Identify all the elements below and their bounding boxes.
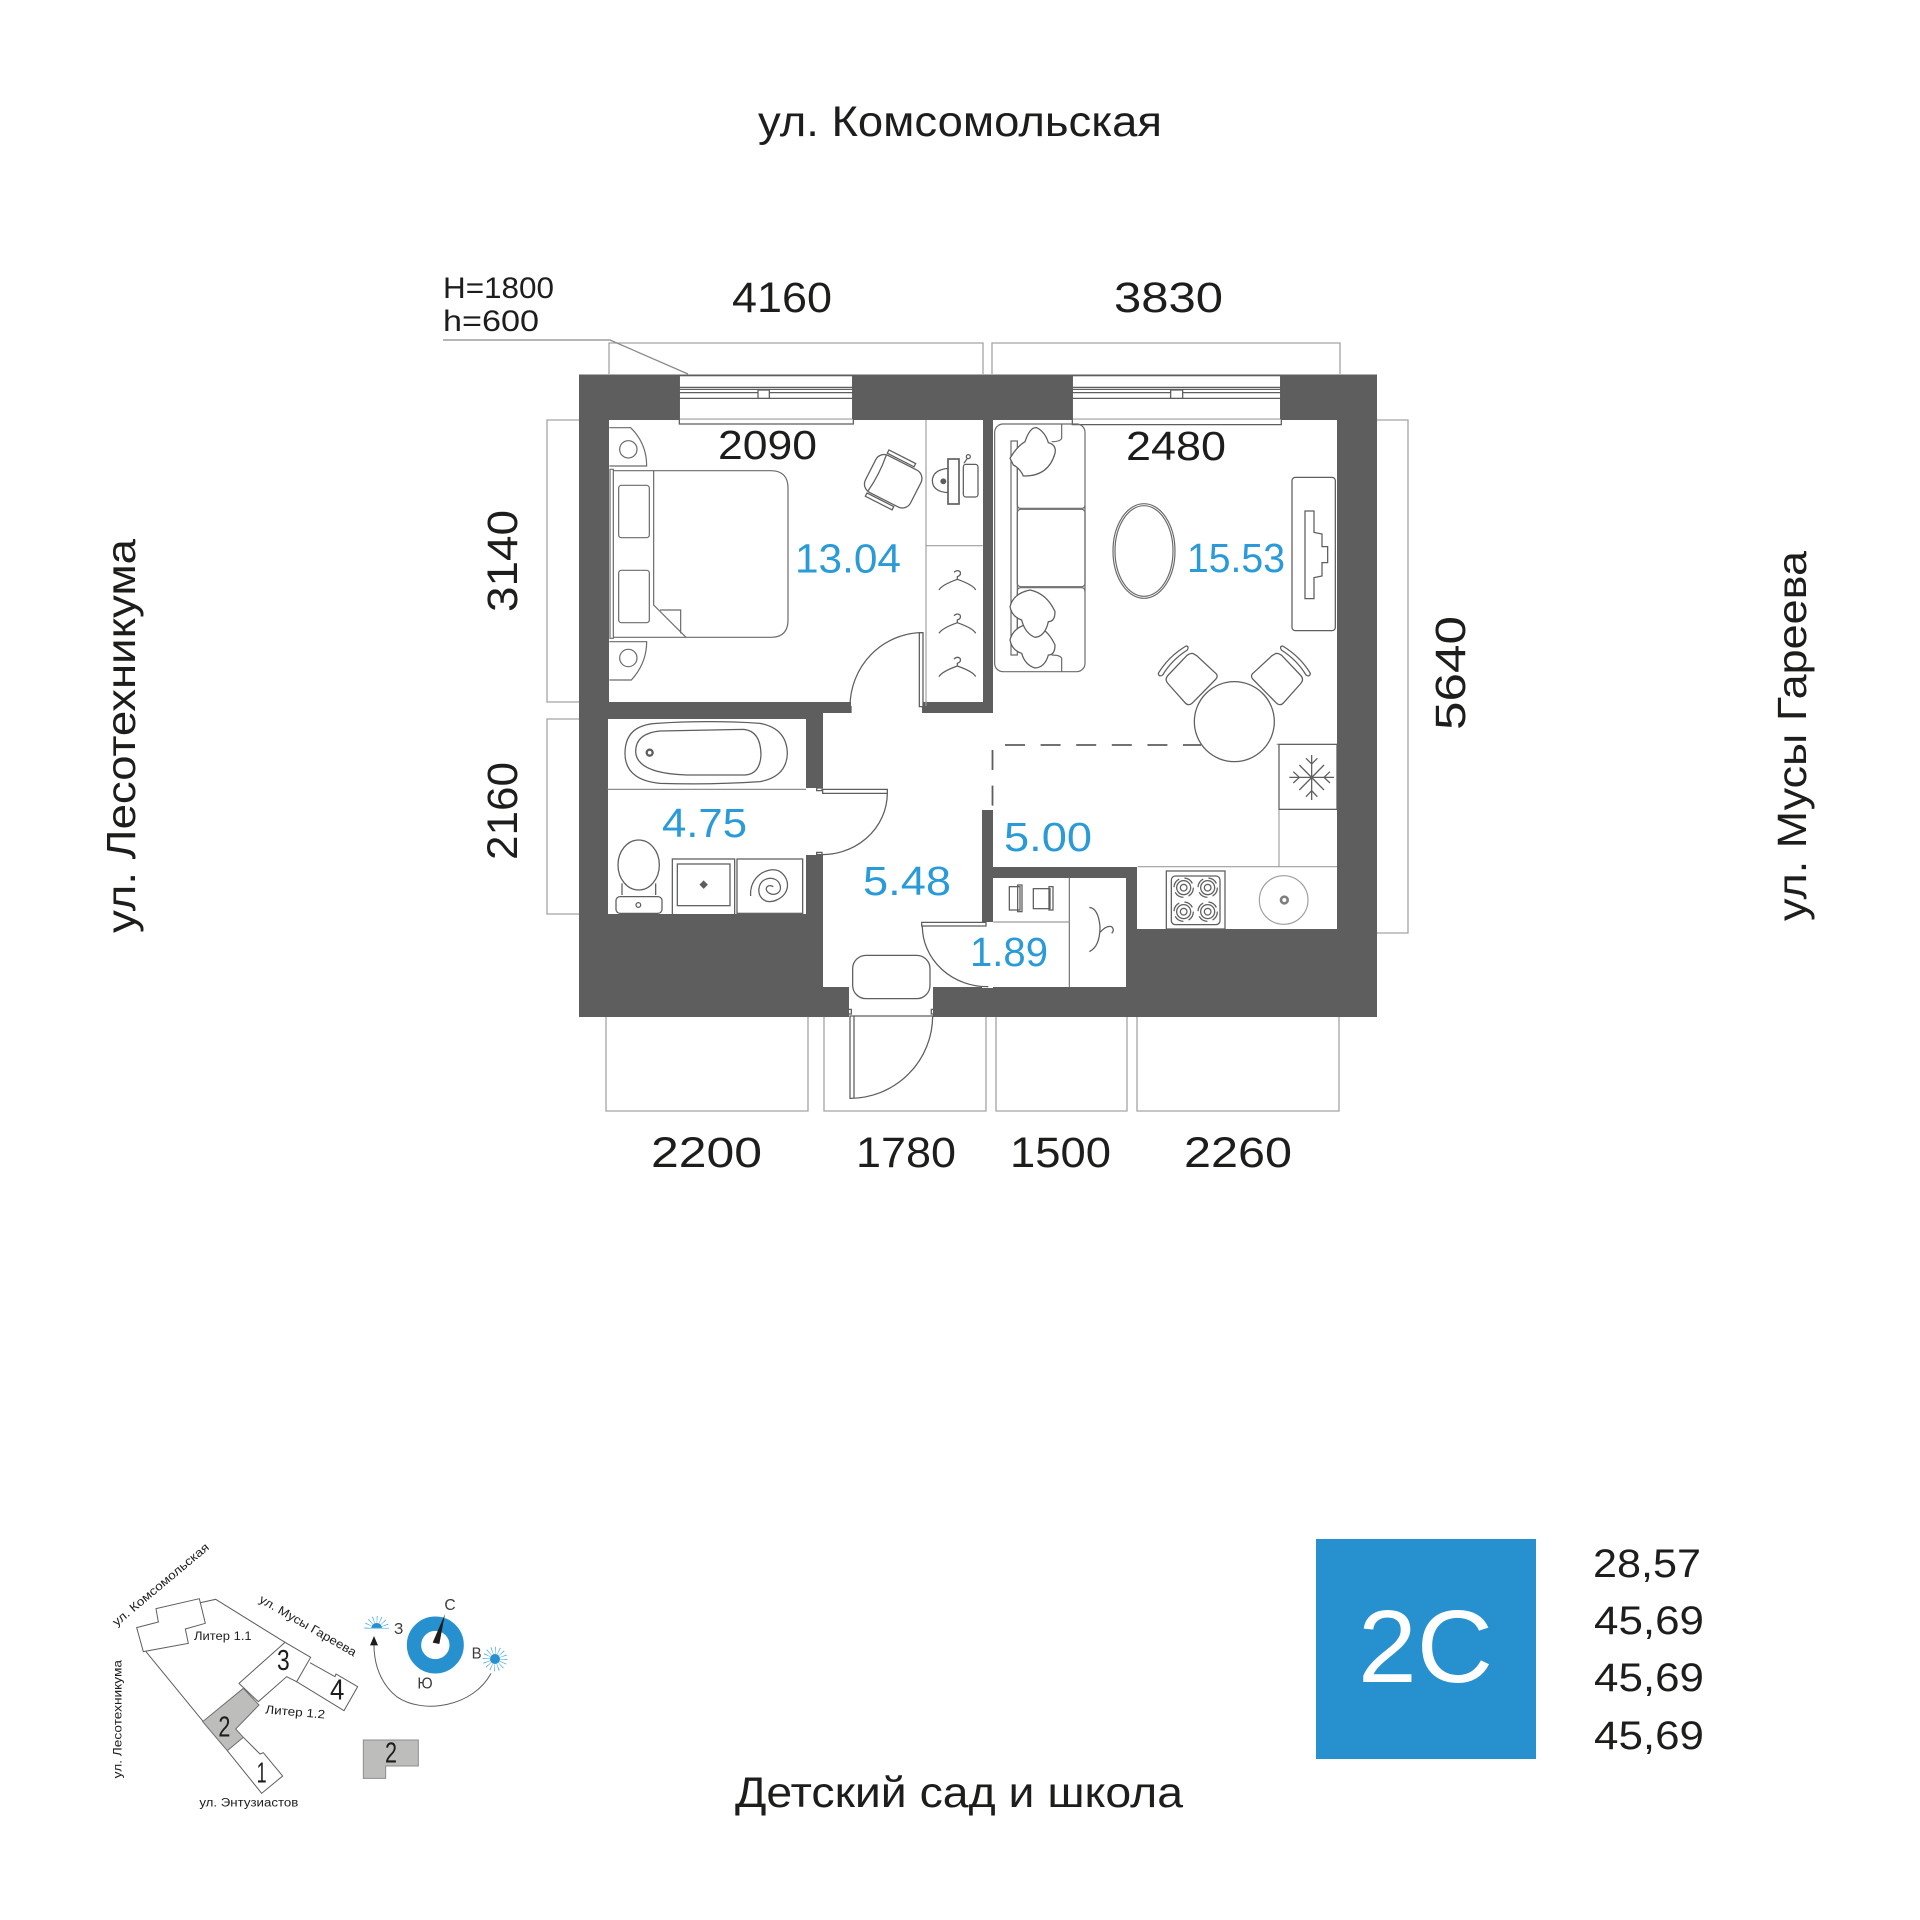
compass bbox=[394, 1597, 482, 1692]
wardrobe bbox=[993, 878, 1069, 987]
door: entrance bbox=[848, 1009, 935, 1098]
window height note: h=600 bbox=[443, 305, 539, 338]
section numbers: 1 bbox=[257, 1757, 267, 1789]
toilet bbox=[616, 840, 662, 913]
site street labels: ул. Лесотехникума bbox=[111, 1660, 125, 1778]
bathtub bbox=[608, 722, 806, 789]
dimension guide lines bbox=[443, 340, 1408, 1111]
kitchen and wardrobe bbox=[993, 744, 1337, 987]
dimension: 2090: 2090 bbox=[718, 422, 817, 468]
site street labels: Литер 1.2 bbox=[265, 1702, 326, 1722]
dimension: 3830: 3830 bbox=[1114, 274, 1223, 322]
dimension: 2200: 2200 bbox=[651, 1129, 762, 1177]
hall bench bbox=[853, 955, 930, 999]
apartment areas: 45,69 bbox=[1594, 1599, 1704, 1643]
section legend: 2 bbox=[385, 1737, 397, 1769]
area: kitchen: 5.00 bbox=[1004, 814, 1092, 860]
armchair bbox=[859, 447, 928, 516]
door: bedroom bbox=[848, 633, 927, 712]
washbasin bbox=[672, 859, 735, 915]
arrow: sun path bbox=[370, 1636, 491, 1706]
bedroom furniture bbox=[609, 376, 983, 712]
desk items bbox=[932, 455, 978, 504]
window: bedroom bbox=[679, 376, 853, 424]
bathroom and hall bbox=[608, 722, 988, 1098]
highlighted section 2 bbox=[203, 1688, 259, 1751]
door: bathroom bbox=[817, 788, 887, 855]
dimension: 5640: 5640 bbox=[1427, 616, 1475, 730]
oval coffee table bbox=[1113, 504, 1175, 598]
fridge bbox=[1279, 744, 1337, 809]
window height note bbox=[443, 272, 554, 338]
site street labels: ул. Комсомольская bbox=[110, 1540, 212, 1629]
dimension: 1780: 1780 bbox=[856, 1129, 956, 1177]
street label: left: ул. Лесотехникума bbox=[98, 539, 144, 933]
site plan bbox=[110, 1540, 503, 1810]
walls bbox=[579, 374, 1377, 1017]
bed bbox=[610, 469, 788, 638]
site street labels: ул. Энтузиастов bbox=[199, 1796, 298, 1810]
street label: top: ул. Комсомольская bbox=[758, 98, 1162, 146]
hangers bbox=[939, 571, 976, 677]
apartment type badge: 2С bbox=[1358, 1589, 1493, 1704]
apartment areas: 45,69 bbox=[1594, 1656, 1704, 1700]
kitchen lines bbox=[1138, 744, 1337, 867]
pillows bbox=[1010, 428, 1055, 668]
dimension: 2480: 2480 bbox=[1126, 423, 1226, 469]
icon: sunrise east bbox=[487, 1651, 503, 1667]
site street labels: Литер 1.1 bbox=[194, 1629, 252, 1643]
wardrobe hanger bbox=[1089, 907, 1113, 952]
dimension: 3140: 3140 bbox=[479, 510, 527, 612]
nightstands bbox=[609, 428, 647, 680]
section numbers bbox=[218, 1645, 344, 1789]
section numbers: 4 bbox=[330, 1675, 344, 1707]
washing machine bbox=[737, 859, 803, 913]
apartment type badge bbox=[1316, 1539, 1536, 1759]
section numbers: 2 bbox=[218, 1712, 230, 1744]
compass: Ю bbox=[417, 1675, 433, 1692]
dimension: 1500: 1500 bbox=[1010, 1129, 1111, 1177]
section numbers: 3 bbox=[277, 1645, 290, 1677]
window height note: H=1800 bbox=[443, 272, 554, 305]
apartment areas bbox=[1593, 1542, 1704, 1758]
tv stand bbox=[1292, 477, 1335, 631]
window: living room bbox=[1072, 376, 1281, 425]
compass: С bbox=[444, 1597, 456, 1614]
kitchen sink bbox=[1259, 876, 1308, 924]
living room furniture bbox=[995, 376, 1335, 762]
area: closet: 1.89 bbox=[970, 929, 1048, 975]
hob bbox=[1166, 871, 1225, 929]
apartment areas: 45,69 bbox=[1594, 1714, 1704, 1758]
area: living room: 15.53 bbox=[1187, 535, 1285, 581]
compass: В bbox=[472, 1645, 482, 1662]
dimension: 2160: 2160 bbox=[479, 762, 527, 860]
street label: bottom: Детский сад и школа bbox=[735, 1769, 1183, 1817]
street label: right: ул. Мусы Гареева bbox=[1769, 551, 1815, 921]
apartment areas: 28,57 bbox=[1593, 1542, 1701, 1586]
compass: З bbox=[394, 1621, 403, 1638]
icon: sunset west bbox=[365, 1620, 389, 1628]
shoes bbox=[1009, 885, 1053, 912]
section legend bbox=[363, 1737, 418, 1778]
dimension: 4160: 4160 bbox=[732, 274, 832, 322]
area: bathroom: 4.75 bbox=[662, 800, 747, 846]
dining chairs bbox=[1158, 646, 1310, 705]
sofa bbox=[995, 424, 1085, 672]
building outlines bbox=[137, 1599, 358, 1793]
area: hall: 5.48 bbox=[863, 858, 951, 904]
dimension: 2260: 2260 bbox=[1184, 1129, 1292, 1177]
door: closet bbox=[922, 922, 988, 987]
site street labels bbox=[110, 1540, 359, 1810]
site street labels: ул. Мусы Гареева bbox=[257, 1592, 359, 1659]
dining table bbox=[1194, 682, 1274, 762]
closet bbox=[926, 420, 983, 707]
kitchen zone dashed boundary bbox=[1005, 744, 1201, 746]
area: bedroom: 13.04 bbox=[795, 536, 901, 582]
